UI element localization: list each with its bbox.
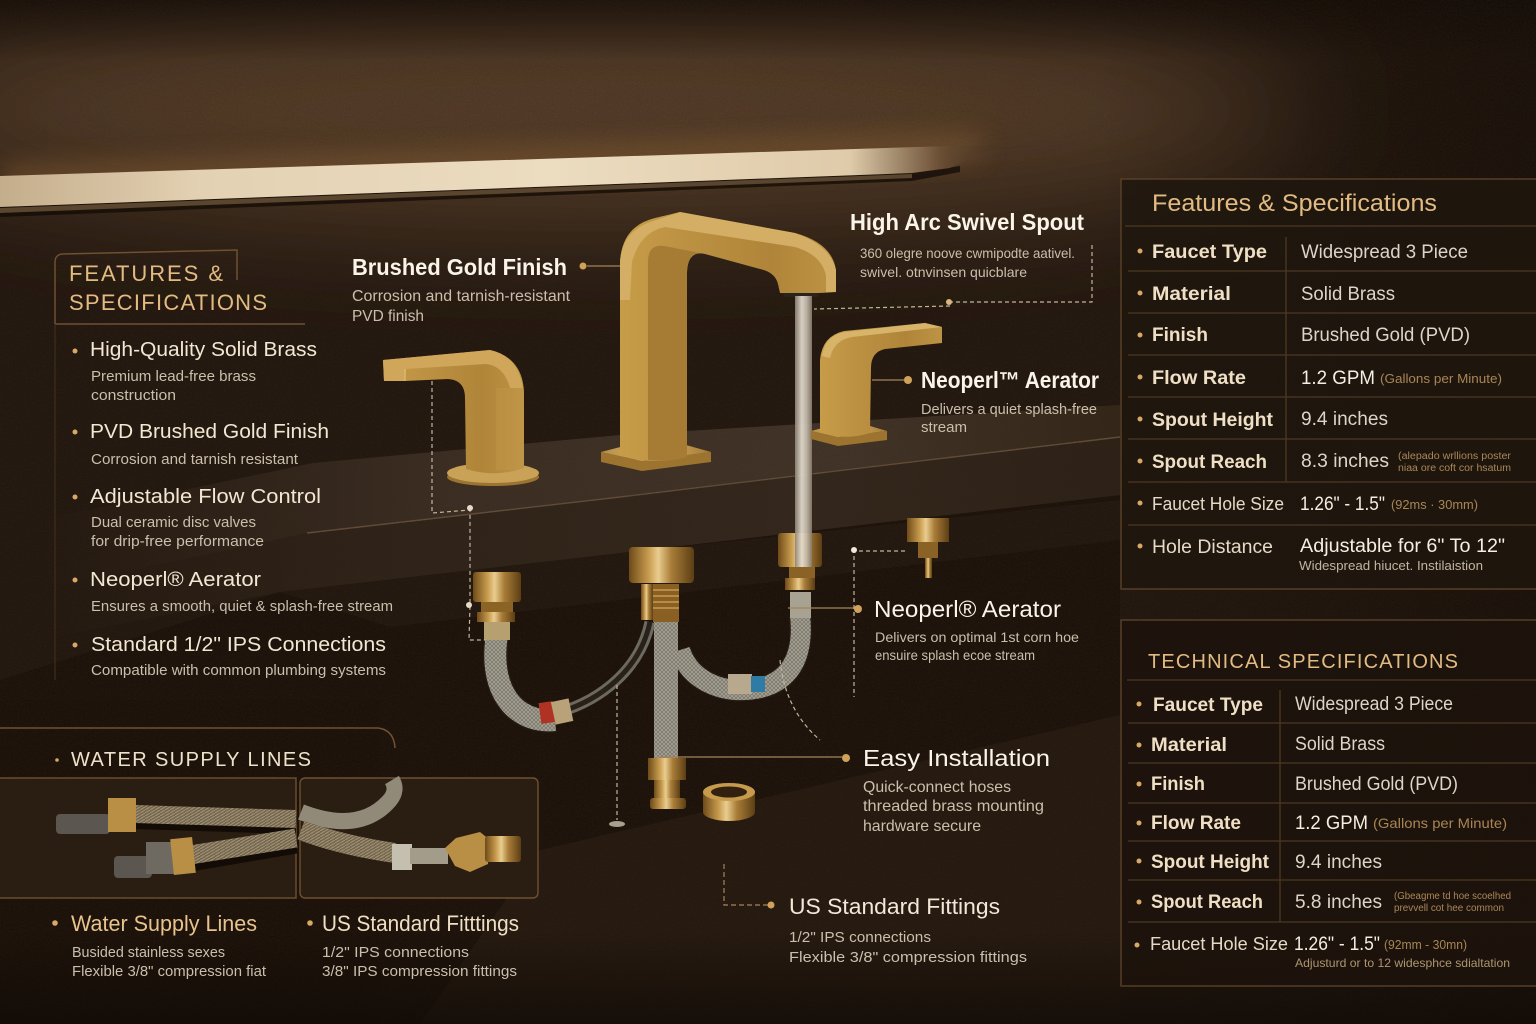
callout: neoperl aerator lower: Neoperl® Aerator [874,596,1061,622]
row: flow rate [1136,813,1507,834]
feature: aerator [72,569,393,615]
row: finish: Brushed Gold (PVD) [1301,325,1470,346]
icon: center supply hose [654,622,678,760]
label: us standard fittings: US Standard Fitttings [322,911,519,936]
icon: left valve [473,572,521,640]
row: faucet hole size: Faucet Hole Size [1150,934,1288,954]
feature: solid brass: Premium lead-free brass [91,368,256,385]
icon: round base [447,463,539,486]
row: spout reach [1136,891,1511,914]
row: spout reach: prevvell cot hee common [1394,903,1504,914]
row: spout reach: 5.8 inches [1295,892,1382,913]
label: water supply lines: Water Supply Lines [71,911,257,936]
row: faucet hole size [1138,494,1478,515]
label: water supply lines: Flexible 3/8" compression fiat [72,963,267,980]
heading: SPECIFICATIONS [69,290,267,315]
row: faucet hole size: 1.26" - 1.5" [1294,934,1380,955]
row: hole distance: Hole Distance [1152,537,1273,558]
floor surface [420,715,1120,1024]
right handle [811,323,942,446]
callout: neoperl aerator lower [788,547,1079,697]
feature: flow control [72,486,321,550]
callout: high arc swivel spout [814,209,1092,309]
row: faucet type: Faucet Type [1152,242,1267,263]
overhead light strip [0,140,1000,217]
row: finish: Finish [1152,325,1208,346]
callout: easy installation: Easy Installation [863,745,1050,771]
left handle [383,350,539,486]
row: flow rate: Flow Rate [1152,368,1246,389]
row: spout reach: Spout Reach [1151,892,1263,913]
callout: high arc swivel spout: High Arc Swivel Spout [850,209,1084,235]
row: material: Solid Brass [1295,734,1385,755]
feature: aerator: Ensures a smooth, quiet & splash-free stream [91,598,393,615]
label: us standard fittings [307,911,519,980]
heading: WATER SUPPLY LINES [71,749,311,771]
row: faucet hole size: (92ms · 30mm) [1391,497,1478,512]
label: water supply lines [52,911,267,980]
label: water supply lines: Busided stainless sexes [72,944,225,961]
icon: brass ring [703,783,755,821]
row: finish [1138,325,1470,346]
feature: ips connections [72,634,386,679]
icon: lever handle [820,323,942,437]
heading: FEATURES & [69,261,223,286]
row: faucet type: Faucet Type [1153,695,1263,716]
callout: us standard fittings: US Standard Fittings [789,894,1000,919]
panel: left features list [55,250,393,680]
panel: water supply lines [0,728,538,980]
feature: aerator: Neoperl® Aerator [90,569,261,591]
callout: brushed gold finish: Corrosion and tarnish-resistant [352,288,571,305]
row: flow rate: Flow Rate [1151,813,1241,834]
heading frame [55,250,305,324]
callout: easy installation: hardware secure [863,818,981,835]
row: spout height: Spout Height [1152,410,1274,431]
row: spout height [1136,852,1382,873]
row: material: Material [1151,735,1227,756]
main faucet [601,212,836,471]
callout: high arc swivel spout: swivel. otnvinsen quicblare [860,264,1027,280]
row: faucet type: Widespread 3 Piece [1295,694,1453,715]
callout: easy installation [609,660,1050,835]
feature: pvd finish [72,421,329,468]
feature: flow control: for drip-free performance [91,533,264,550]
table heading: Features & Specifications [1152,190,1437,217]
callout: neoperl aerator upper: stream [921,419,967,436]
underside valves and hoses [473,518,949,821]
label: us standard fittings: 3/8" IPS compression fittings [322,963,517,980]
icon: small valve behind [907,518,949,578]
label: us standard fittings: 1/2" IPS connections [322,944,469,961]
panel: technical specifications table [1121,620,1536,986]
icon: right hose [680,615,801,694]
row: finish [1136,774,1458,795]
callout: easy installation: threaded brass mounting [863,798,1044,815]
water stream [795,296,812,541]
row: finish: Finish [1151,774,1205,795]
feature: ips connections: Standard 1/2" IPS Connections [91,634,386,656]
table heading: TECHNICAL SPECIFICATIONS [1148,651,1458,673]
row: finish: Brushed Gold (PVD) [1295,774,1458,795]
feature: ips connections: Compatible with common plumbing systems [91,662,386,679]
callout: high arc swivel spout: 360 olegre noove cwmipodte aativel. [860,245,1075,261]
row: spout height [1138,409,1388,431]
row: faucet hole size [1134,934,1510,970]
row: flow rate: 1.2 GPM [1295,813,1368,834]
row: spout height: 9.4 inches [1295,852,1382,873]
feature: pvd finish: Corrosion and tarnish resistant [91,451,299,468]
row: faucet type [1136,694,1453,716]
feature: flow control: Dual ceramic disc valves [91,514,256,531]
icon: lever handle [383,350,524,473]
icon: square base [811,426,887,446]
row: spout reach: niaa ore coft cor hsatum [1398,463,1511,474]
callout: neoperl aerator upper [872,367,1099,436]
row: hole distance [1138,536,1505,573]
counter top and front [40,405,1120,640]
row: faucet hole size: Faucet Hole Size [1152,494,1284,514]
icon: left hose [495,622,650,725]
row: faucet type: Widespread 3 Piece [1301,242,1468,263]
row: material [1136,734,1385,756]
photo panel: brass fitting [300,778,538,898]
row: spout reach: (Gbeagme td hoe scoelhed [1394,891,1511,902]
icon: high arc spout [620,212,836,461]
row: spout height: 9.4 inches [1301,409,1388,430]
row: flow rate: (Gallons per Minute) [1380,371,1502,386]
callout: brushed gold finish: Brushed Gold Finish [352,254,567,280]
row: spout reach: (alepado wrllions poster [1398,451,1512,462]
icon: bottom hose fitting [648,758,686,809]
heading [69,261,267,315]
row: flow rate [1138,368,1502,389]
callout: neoperl aerator upper: Neoperl™ Aerator [921,367,1099,393]
feature: solid brass: construction [91,387,176,404]
feature: pvd finish: PVD Brushed Gold Finish [90,421,329,443]
row: hole distance: Adjustable for 6" To 12" [1300,536,1505,557]
row: flow rate: (Gallons per Minute) [1373,815,1507,831]
panel: features and specifications table [1121,179,1536,589]
row: material: Solid Brass [1301,284,1395,305]
callout: brushed gold finish [352,254,620,325]
row: spout reach [1138,451,1512,474]
feature: flow control: Adjustable Flow Control [90,486,321,508]
callout: left handle leader [432,381,486,640]
row: spout height: Spout Height [1151,852,1270,873]
row: faucet type [1138,242,1468,263]
callout: us standard fittings: Flexible 3/8" compression fittings [789,949,1027,966]
callout: us standard fittings: 1/2" IPS connections [789,929,931,946]
row: faucet hole size: Adjusturd or to 12 widesphce sdialtation [1295,956,1510,970]
feature: solid brass [72,339,317,404]
row: faucet hole size: (92mm - 30mn) [1384,937,1467,952]
dark wall under counter [0,495,1120,1024]
row: flow rate: 1.2 GPM [1301,368,1375,389]
callout: easy installation: Quick-connect hoses [863,779,1011,796]
feature: solid brass: High-Quality Solid Brass [90,339,317,361]
row: spout reach: 8.3 inches [1301,451,1389,472]
callout: brushed gold finish: PVD finish [352,308,424,325]
photo panel: hose ends [0,778,296,898]
callout: us standard fittings [724,864,1027,966]
row: spout reach: Spout Reach [1152,452,1267,473]
icon: center valve [629,547,694,622]
row: hole distance: Widespread hiucet. Instilaistion [1299,558,1483,573]
row: faucet hole size: 1.26" - 1.5" [1300,494,1385,515]
callout: neoperl aerator upper: Delivers a quiet splash-free [921,401,1097,418]
row: material [1138,284,1395,305]
callout: neoperl aerator lower: ensuire splash ecoe stream [875,647,1035,663]
icon: spout base plate [601,445,711,471]
row: material: Material [1152,284,1231,305]
callout: neoperl aerator lower: Delivers on optimal 1st corn hoe [875,629,1079,645]
icon: right valve [778,533,822,618]
